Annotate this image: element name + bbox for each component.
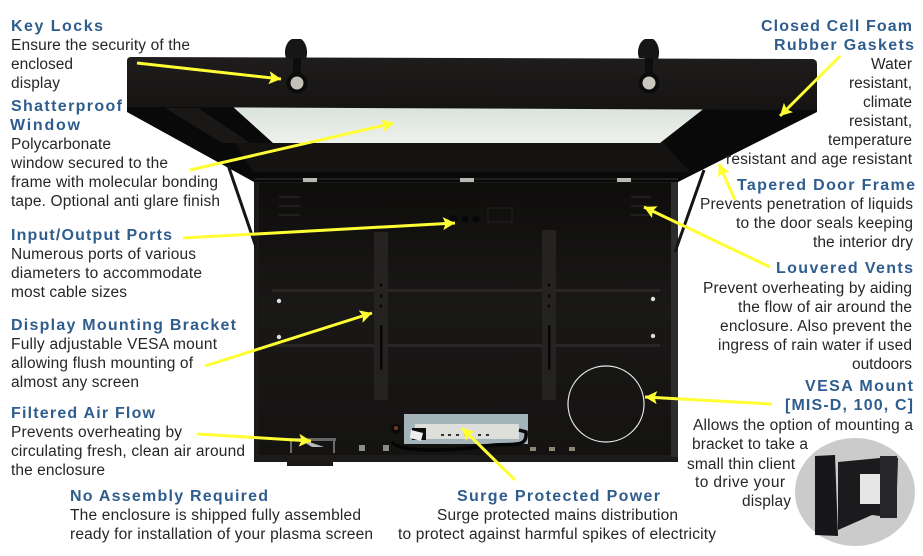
description: resistant, bbox=[849, 113, 912, 130]
description: frame with molecular bonding bbox=[11, 174, 218, 191]
description: the enclosure bbox=[11, 462, 105, 479]
arrow: tapered door frame bbox=[719, 164, 735, 200]
description bbox=[11, 37, 190, 92]
heading: No Assembly Required bbox=[70, 488, 268, 505]
description: allowing flush mounting of bbox=[11, 355, 194, 372]
arrow: rubber gaskets bbox=[780, 56, 840, 116]
description: to the door seals keeping bbox=[736, 215, 913, 232]
description bbox=[10, 136, 220, 210]
description: diameters to accommodate bbox=[11, 265, 202, 282]
enclosure body bbox=[254, 180, 678, 466]
description: Fully adjustable VESA mount bbox=[11, 336, 218, 353]
VESA mount highlight circle bbox=[568, 366, 644, 442]
description: Ensure the security of the bbox=[11, 37, 190, 54]
heading bbox=[10, 98, 123, 134]
heading: Input/Output Ports bbox=[11, 227, 172, 244]
surge protected power strip bbox=[404, 414, 528, 444]
input/output ports bbox=[449, 208, 512, 223]
heading: VESA Mount bbox=[805, 378, 914, 395]
description: the flow of air around the bbox=[738, 299, 912, 316]
heading: Closed Cell Foam bbox=[761, 18, 912, 35]
heading: Surge Protected Power bbox=[457, 488, 660, 505]
description: display bbox=[742, 493, 791, 510]
door lid underside bbox=[127, 106, 817, 182]
description bbox=[11, 336, 218, 391]
arrow: shatterproof window bbox=[190, 123, 394, 170]
arrow: filtered air flow bbox=[197, 434, 311, 441]
description: almost any screen bbox=[11, 374, 139, 391]
callout: VESA mount bbox=[687, 378, 914, 510]
description: bracket to take a bbox=[692, 436, 808, 453]
arrow: key locks bbox=[137, 63, 281, 79]
description bbox=[11, 246, 202, 301]
louvered vents bbox=[279, 197, 651, 215]
heading: Louvered Vents bbox=[776, 260, 913, 277]
description: resistant, bbox=[849, 75, 912, 92]
door support struts bbox=[228, 165, 704, 252]
arrow: display mounting bracket bbox=[205, 313, 372, 366]
heading: Tapered Door Frame bbox=[737, 177, 915, 194]
arrow: input/output ports bbox=[183, 223, 455, 238]
heading bbox=[761, 18, 914, 54]
arrows bbox=[137, 56, 840, 480]
mounting brackets bbox=[374, 230, 556, 400]
description: to protect against harmful spikes of electricity bbox=[398, 526, 716, 543]
description: Numerous ports of various bbox=[11, 246, 196, 263]
description: window secured to the bbox=[10, 155, 168, 172]
key lock left bbox=[285, 39, 308, 94]
description bbox=[703, 280, 912, 373]
arrow: louvered vents bbox=[644, 207, 770, 267]
callout: surge protected power bbox=[398, 488, 716, 543]
callout: display mounting bracket bbox=[11, 317, 237, 391]
callout: key locks bbox=[11, 18, 190, 92]
description bbox=[700, 196, 913, 251]
description bbox=[687, 417, 913, 510]
heading bbox=[785, 378, 914, 414]
arrow: surge protected power bbox=[462, 428, 515, 480]
callout: filtered air flow bbox=[11, 405, 245, 479]
heading: Filtered Air Flow bbox=[11, 405, 156, 422]
heading: Shatterproof bbox=[11, 98, 123, 115]
air filter fan bbox=[290, 438, 336, 453]
description: Water bbox=[871, 56, 912, 73]
description: tape. Optional anti glare finish bbox=[11, 193, 220, 210]
small cable clips bbox=[359, 445, 389, 451]
power cables and plug bbox=[391, 424, 526, 450]
description: most cable sizes bbox=[11, 284, 127, 301]
callout: shatterproof window bbox=[10, 98, 220, 210]
inset photo: VESA bracket bbox=[795, 438, 915, 546]
heading: Display Mounting Bracket bbox=[11, 317, 237, 334]
description: Prevent overheating by aiding bbox=[703, 280, 912, 297]
heading: [MIS-D, 100, C] bbox=[785, 397, 913, 414]
callout: input/output ports bbox=[11, 227, 202, 301]
callout: louvered vents bbox=[703, 260, 913, 373]
heading: Rubber Gaskets bbox=[774, 37, 914, 54]
heading: Key Locks bbox=[11, 18, 103, 35]
description: Polycarbonate bbox=[11, 136, 111, 153]
description: small thin client bbox=[687, 456, 796, 473]
description: climate bbox=[863, 94, 912, 111]
description: circulating fresh, clean air around bbox=[11, 443, 245, 460]
key lock right bbox=[638, 39, 660, 94]
description: Prevents penetration of liquids bbox=[700, 196, 913, 213]
arrow: VESA mount bbox=[645, 397, 772, 404]
description bbox=[726, 56, 913, 168]
description: The enclosure is shipped fully assembled bbox=[70, 507, 361, 524]
description: Prevents overheating by bbox=[11, 424, 182, 441]
description: ingress of rain water if used bbox=[718, 337, 912, 354]
callout: tapered door frame bbox=[700, 177, 915, 251]
heading: Window bbox=[10, 117, 81, 134]
description: Allows the option of mounting a bbox=[693, 417, 913, 434]
description bbox=[70, 507, 373, 543]
description bbox=[11, 424, 245, 479]
description: temperature bbox=[828, 132, 912, 149]
description: enclosed bbox=[11, 56, 73, 73]
description: the interior dry bbox=[813, 234, 913, 251]
enclosure photo bbox=[127, 39, 817, 466]
description: outdoors bbox=[852, 356, 912, 373]
description: resistant and age resistant bbox=[726, 151, 913, 168]
description: enclosure. Also prevent the bbox=[720, 318, 912, 335]
description bbox=[398, 507, 716, 543]
door lid front panel bbox=[127, 57, 817, 110]
mains connectors bbox=[530, 447, 575, 451]
description: to drive your bbox=[695, 474, 785, 491]
description: Surge protected mains distribution bbox=[437, 507, 678, 524]
callout: closed cell foam rubber gaskets bbox=[726, 18, 914, 168]
callout: no assembly required bbox=[70, 488, 373, 543]
description: ready for installation of your plasma screen bbox=[70, 526, 373, 543]
description: display bbox=[11, 75, 60, 92]
hinges bbox=[303, 178, 631, 182]
